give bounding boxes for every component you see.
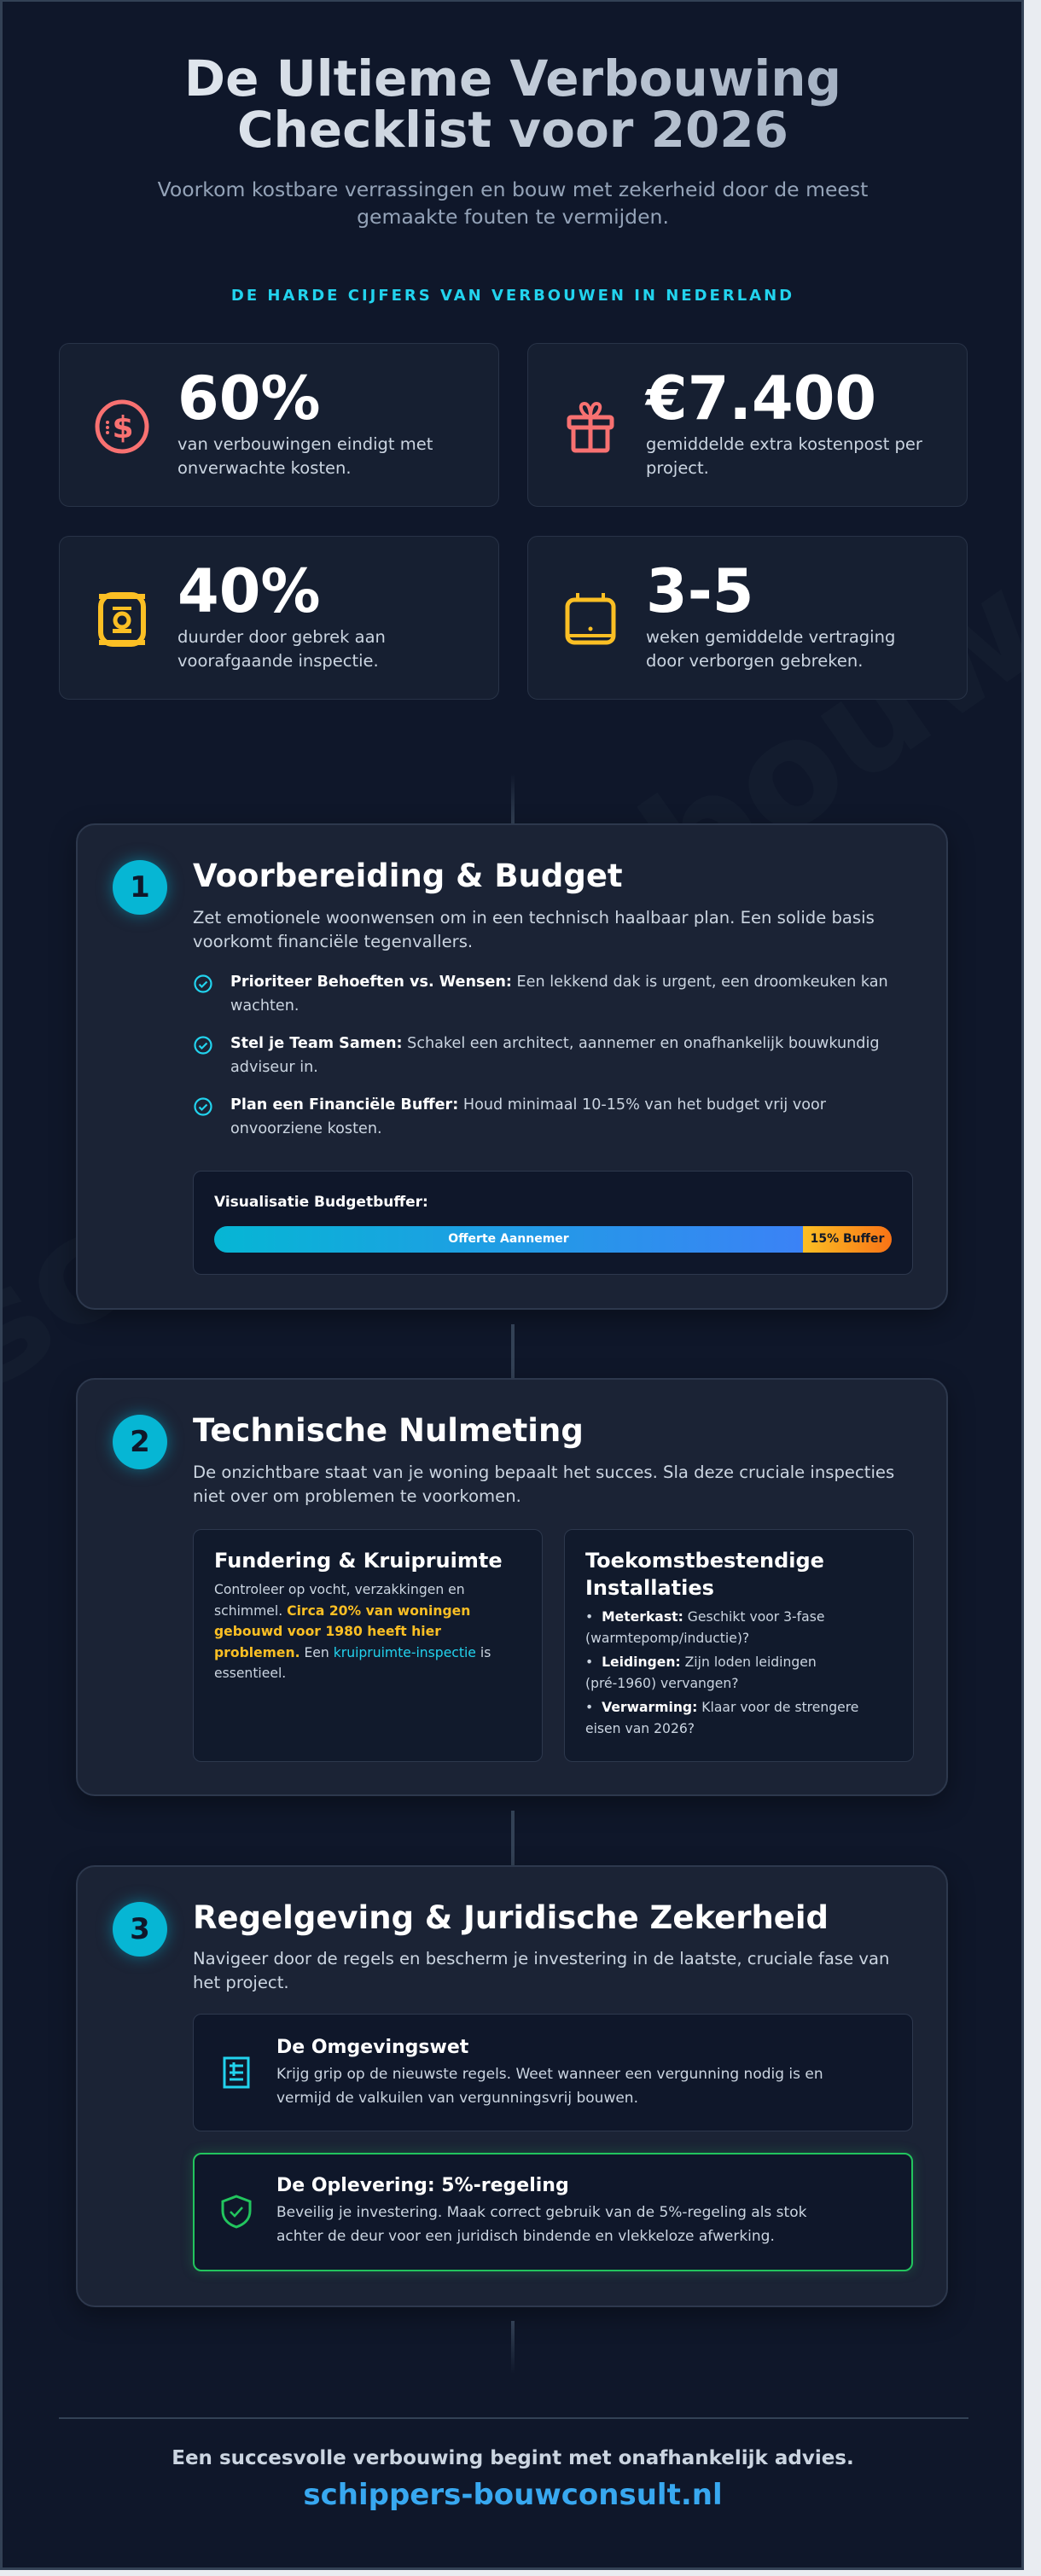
title: De Ultieme Verbouwing	[184, 49, 841, 108]
check item 1: Prioriteer Behoeften vs. Wensen: Een lekkend dak is urgent, een droomkeuken kan wachten.	[230, 974, 888, 1015]
icon: inspection	[98, 592, 146, 647]
stat card: 3-5	[527, 536, 968, 700]
title: Checklist voor 2026	[237, 101, 788, 159]
icon: document	[224, 2056, 249, 2089]
bar: Offerte Aannemer	[448, 1232, 569, 1246]
stat card: 3-5: 3-5	[646, 556, 753, 626]
title	[3, 53, 1023, 155]
step number 3: 3	[130, 1912, 150, 1946]
connector	[511, 1324, 515, 1380]
icon: shield	[222, 2195, 251, 2229]
sub panel: Oplevering: De Oplevering: 5%-regeling	[276, 2175, 569, 2196]
description: Navigeer door de regels en bescherm je investering in de laatste, cruciale fase van het project.	[193, 1949, 889, 1992]
sub panel: foundation: Controleer op vocht, verzakkingen en schimmel. Circa 20% van woningen gebouwd voor 1980 heeft hier problemen. Een kruipruimte-inspectie is essentieel.	[214, 1582, 491, 1681]
sub panel: installations: • Verwarming: Klaar voor de strengere eisen van 2026?	[585, 1700, 858, 1736]
description: Zet emotionele woonwensen om in een technisch haalbaar plan. Een solide basis voorkomt financiële tegenvallers.	[193, 908, 875, 951]
panel: step 3	[76, 1865, 948, 2307]
footer text: Een succesvolle verbouwing begint met onafhankelijk advies.	[172, 2447, 854, 2469]
step number 2	[113, 1415, 167, 1469]
stat card: 60%	[59, 343, 499, 507]
sub panel: installations	[564, 1529, 914, 1762]
sub panel: foundation: Fundering & Kruipruimte	[214, 1549, 503, 1573]
budget buffer chart: Visualisatie Budgetbuffer:	[214, 1194, 428, 1211]
divider line	[59, 2417, 968, 2419]
step number 2: 2	[130, 1425, 150, 1459]
icon: calendar	[565, 593, 616, 645]
connector	[511, 2321, 515, 2374]
heading: Voorbereiding & Budget	[193, 858, 623, 894]
panel: step 1	[76, 823, 948, 1310]
section label: DE HARDE CIJFERS VAN VERBOUWEN IN NEDERLAND	[231, 287, 794, 305]
check item 3: Plan een Financiële Buffer: Houd minimaal 10-15% van het budget vrij voor onvoorziene kosten.	[230, 1096, 826, 1137]
icon: gift	[567, 402, 614, 452]
heading: Technische Nulmeting	[193, 1412, 584, 1449]
subtitle	[157, 177, 868, 229]
connector	[511, 774, 515, 825]
sub panel: installations: • Meterkast: Geschikt voor 3-fase (warmtepomp/inductie)?	[585, 1609, 824, 1645]
heading: Regelgeving & Juridische Zekerheid	[193, 1899, 829, 1936]
checklist	[194, 974, 888, 1137]
stat card: 7400: gemiddelde extra kostenpost per project.	[646, 434, 922, 478]
bar: 15% Buffer	[811, 1232, 884, 1246]
sub panel: Omgevingswet	[193, 2014, 913, 2131]
stat card: 40%: 40%	[177, 556, 321, 626]
sub panel: Oplevering	[193, 2153, 913, 2271]
stat card: 7400	[527, 343, 968, 507]
footer url: schippers-bouwconsult.nl	[303, 2478, 723, 2512]
sub panel: installations: • Leidingen: Zijn loden leidingen (pré-1960) vervangen?	[585, 1654, 817, 1691]
connector	[511, 1811, 515, 1866]
stat card: 40%	[59, 536, 499, 700]
stat card: 60%: van verbouwingen eindigt met onverwachte kosten.	[177, 434, 433, 478]
step number 3	[113, 1902, 167, 1957]
budget buffer chart	[193, 1171, 913, 1275]
stat card: 40%: duurder door gebrek aan voorafgaande inspectie.	[177, 627, 386, 671]
description: De onzichtbare staat van je woning bepaalt het succes. Sla deze cruciale inspecties niet over om problemen te voorkomen.	[193, 1462, 894, 1506]
step number 1	[113, 860, 167, 915]
panel: step 2	[76, 1378, 948, 1796]
icon: money	[96, 399, 148, 454]
sub panel: Oplevering: Beveilig je investering. Maak correct gebruik van de 5%-regeling als stok achter de deur voor een juridisch bindende en vlekkeloze afwerking.	[276, 2204, 806, 2245]
stat card: 3-5: weken gemiddelde vertraging door verborgen gebreken.	[646, 627, 895, 671]
sub panel: Omgevingswet: De Omgevingswet	[276, 2037, 468, 2058]
sub panel: Omgevingswet: Krijg grip op de nieuwste regels. Weet wanneer een vergunning nodig is en vermijd de valkuilen van vergunningsvrij bouwen.	[276, 2066, 823, 2107]
subtitle: gemaakte fouten te vermijden.	[357, 205, 669, 229]
check item 2: Stel je Team Samen: Schakel een architect, aannemer en onafhankelijk bouwkundig adviseur in.	[230, 1035, 879, 1076]
stat card: 60%: 60%	[177, 363, 321, 433]
stat card: 7400: €7.400	[646, 363, 876, 433]
sub panel: foundation	[193, 1529, 543, 1762]
step number 1: 1	[130, 870, 150, 904]
icon: money: $	[112, 410, 134, 445]
bar	[214, 1226, 892, 1253]
sub panel: installations: Toekomstbestendige Installaties	[585, 1549, 824, 1600]
subtitle: Voorkom kostbare verrassingen en bouw met zekerheid door de meest	[158, 177, 868, 201]
